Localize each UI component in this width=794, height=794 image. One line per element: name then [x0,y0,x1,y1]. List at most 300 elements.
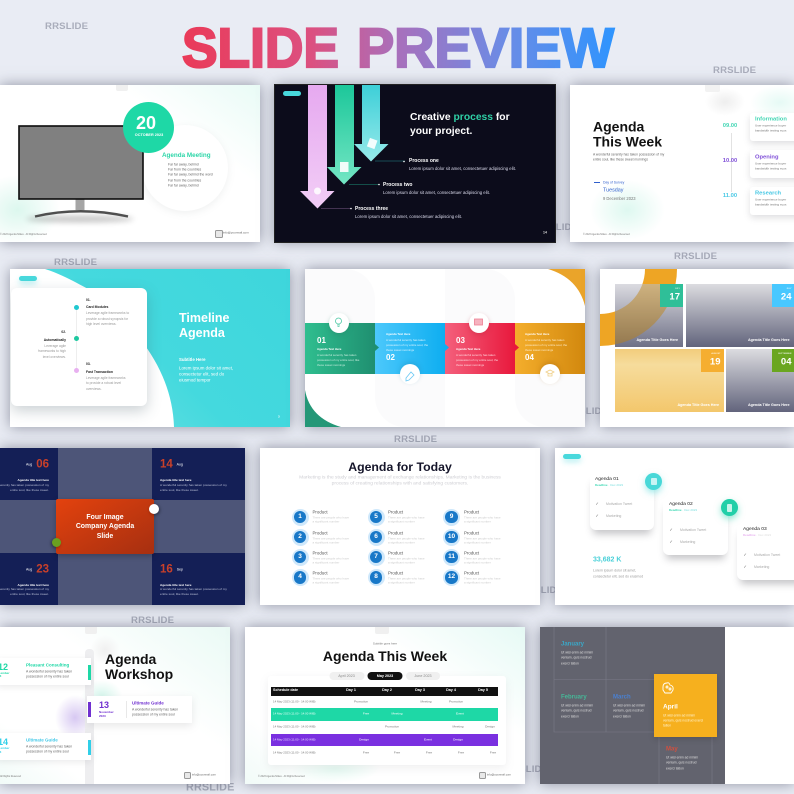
badge [19,276,37,281]
item 7 [388,549,425,564]
card 2 text: Agenda 02 [669,502,693,507]
date circle [123,102,174,153]
item 2 text: 02. [61,330,66,334]
segment arrows [375,344,519,351]
panel: agenda this week slide [570,85,794,242]
heading: your project. [410,126,472,137]
item 9: a significant number [464,519,491,523]
step 03 text: A wonderful serenity has taken [456,353,495,357]
april text: tation [663,724,671,728]
process two: Process two [383,182,412,188]
image 3 [615,349,724,412]
item 6: There are people who have [388,536,425,540]
row 5 value: Free [490,750,496,754]
item 7: There are people who have [388,556,425,560]
date 16 sep: 16 Sep [160,563,183,575]
card 3 text: possession of my entire soul [26,750,69,754]
center title: Company Agenda [76,523,134,530]
row 5 value: Free [394,750,400,754]
card 3 [0,733,91,760]
row 4 value: Design [453,737,463,741]
card 2 [663,498,728,555]
item 1 text: Leverage agile frameworks to [86,311,129,315]
text block top right: Agenda title text here [160,478,191,482]
item 12: Product [464,570,479,575]
row 2 value: Free [363,711,369,715]
card 1 text: A wonderful serenity has taken [26,670,72,674]
card 3 text [743,526,771,538]
agenda list: Far far away, behind [168,162,199,166]
item 4: a significant number [312,580,339,584]
item 2 text: frameworks to high [38,349,66,353]
badge number 10: 10 [448,532,455,540]
card 3 text: A wonderful serenity has taken [26,744,72,748]
card: research [750,187,794,215]
item 3 text: overviews. [86,387,102,391]
row 1 value: Meeting [420,699,432,703]
watermark: RRSLIDE [535,222,578,233]
segment 03 [445,323,515,374]
header day 1: Day 1 [346,688,356,692]
panel: monthly calendar slide [540,627,794,784]
badge number 11: 11 [448,552,455,560]
header day 2: Day 2 [382,688,392,692]
row 3 value: Meeting [452,724,464,728]
item 2: Product [312,530,328,535]
item 4: There are people who have [312,576,349,580]
item 11: Product [464,550,479,555]
card 1 checks: ✓ [596,513,599,518]
watermark: RRSLIDE [674,251,717,262]
card 1 text: Deadline · Dec 2023 [595,482,623,486]
text block top left: Agenda title text here [18,478,49,482]
row 5 value: Free [458,750,464,754]
header day 5: Day 5 [478,688,488,692]
badge number 2 [294,530,306,543]
card 1 date: ember [0,670,10,674]
date 04 [772,349,794,372]
watermark: RRSLIDE [394,434,437,445]
dark background [540,627,725,784]
segment 01 [305,323,375,374]
timeline card [11,288,147,406]
process one: Lorem ipsum dolor sit amet, consectetuer adipiscing elit. [409,166,516,171]
card 3 accent [88,740,91,754]
subtitle: Subtitle goes here [373,641,397,645]
step 04 text: possession of my entire soul, the [525,343,567,347]
text block top right: A wonderful serenity has taken possession of my [160,483,227,487]
card 1 text: Agenda 01 [595,476,619,482]
item 3: There are people who have [312,556,349,560]
card: opening [750,150,794,178]
heading: Workshop [105,666,173,682]
march: veniam, quis nostrud [613,709,643,713]
icon: april [661,682,675,694]
number 24: 24 [781,291,792,302]
day: Tuesday [603,187,623,193]
time 09.00: 09.00 [723,123,737,129]
heading: Creative process for [410,112,510,123]
april text: veniam, quis nostrud exerci [663,718,703,722]
text block bottom right: A wonderful serenity has taken possession of my [160,587,227,591]
agenda list: Far from the countries [168,178,201,182]
card 1 checks: ✓ [596,501,599,506]
navy block bottom right [152,553,245,605]
badge number 3: 3 [298,552,302,560]
agenda heading: Agenda Meeting [162,151,211,158]
panel: monitor agenda meeting slide [0,85,260,242]
item 4: Product [312,570,328,575]
item 3: a significant number [312,560,339,564]
badge 11 [443,548,460,566]
heading: This Week [593,134,662,150]
item 10: a significant number [464,540,491,544]
row 3 value: Design [485,724,495,728]
badge number 8 [370,571,382,584]
step 01 text: 01 [317,336,326,345]
panel: timeline agenda slide [10,269,290,427]
item 8: a significant number [388,580,415,584]
icon: agenda 02 circle [720,499,738,516]
email: info@yourmail.com [487,773,511,777]
step 04 text: A wonderful serenity has taken [525,338,564,342]
row 1 value: Promotion [449,699,463,703]
day of survey: Day of Survey [603,180,624,184]
white curved background [10,269,174,427]
orange ring [600,269,677,346]
item 7: Product [388,550,403,555]
process one [409,158,516,171]
january: January [561,641,584,647]
card 3 checks: ✓ [744,552,747,557]
item 1 text: Card Modules [86,305,108,309]
panel: four step band slide [305,269,585,427]
badge 7 [368,548,384,566]
green dot [52,538,60,547]
badge number 12: 12 [448,573,455,580]
description [593,153,664,162]
badge number 4: 4 [298,573,302,580]
body text [179,366,233,383]
badge number 6: 6 [374,532,378,540]
badge 6 [368,528,384,546]
item 1: a significant number [312,519,339,523]
opening text [755,154,786,170]
text block bottom right [160,582,227,596]
item 8: Product [388,570,403,575]
card 1 list: Marketing [606,514,621,518]
card 1 date [0,662,10,678]
card 2 date [99,700,114,718]
date aug 23: Aug 23 [26,563,49,575]
may: Ut wisi enim ad minim [666,755,698,759]
tab june: June 2023 [414,674,432,678]
heading: Agenda [593,118,644,134]
text block bottom left: Agenda title text here [18,582,49,586]
item 5: a significant number [388,519,415,523]
card 1 [590,473,654,530]
date aug 06: Aug 06 [26,458,49,470]
row 2 value: Meeting [391,711,403,715]
step 04 text [525,332,567,362]
time 11.00: 11.00 [723,193,737,199]
body text: consectetur elit, sed do [179,372,224,377]
card 3 checks [744,549,747,573]
card 2 text: Ultimate Guide [132,700,164,705]
card 1 list [606,498,632,522]
step 01 text: possession of my entire soul, like [317,358,359,362]
timeline line [730,133,732,192]
step 03 text [456,336,498,367]
timeline dot 3 [74,368,78,373]
copyright: © 2023 Agenda Slides · All Rights Reserved [0,233,47,236]
step 03 text: possession of my entire soul, the [456,358,498,362]
month august: AUGUST [711,353,720,355]
caption 4: Agenda Title Goes Here [748,403,790,407]
step 02 text: possession of my entire soul, the [386,343,428,347]
step 02 text: Agenda Text Here [386,332,410,336]
header day 4: Day 4 [446,688,456,692]
panel: four image company agenda slide [0,448,245,605]
row 2 value: Event [456,711,464,715]
table row green [271,708,498,720]
card 3 date [0,738,10,754]
item 11: a significant number [464,560,491,564]
caption 3: Agenda Title Goes Here [677,403,719,407]
image 2 [686,284,794,347]
tab june [406,672,440,680]
badge 1 [292,508,308,526]
february: veniam, quis nostrud [561,709,591,713]
text block top left: serenity has taken possession of my [0,483,49,487]
item 5: Product [388,509,403,514]
item 3: Product [312,550,328,555]
may [666,744,698,772]
item 8 [388,569,425,585]
corner accents [305,269,585,427]
watermark: RRSLIDE [131,615,174,626]
badge [563,454,581,459]
march: Ut wisi enim ad minim [613,703,645,707]
card 1 checks [596,498,599,522]
badge number 2: 2 [298,532,302,540]
heading [593,118,662,150]
table header [271,686,498,696]
navy block top left [0,448,58,500]
heading: Agenda This Week [323,648,447,664]
card 2 text: possession of my entire soul [132,712,175,716]
february [561,692,593,720]
tab may [368,672,402,680]
badge number 10 [445,530,458,543]
caption 1: Agenda Title Goes Here [636,338,678,342]
header day 3: Day 3 [415,688,425,692]
number 19: 19 [710,356,720,367]
card 3 date: ember [0,746,10,750]
card 3 list [754,549,780,573]
card 1 text: Pleasant Consulting [26,663,69,668]
february: Ut wisi enim ad minim [561,703,593,707]
center title [76,513,134,539]
item 5: There are people who have [388,515,425,519]
item 9: Product [464,509,479,514]
badge number 1 [294,510,306,523]
badge number 11 [445,550,458,563]
timeline line [75,307,78,371]
information text: User experience buyer [755,124,786,128]
april text [663,700,703,729]
badge number 4 [294,571,306,584]
item 11: There are people who have [464,556,501,560]
heading: Agenda [179,326,225,340]
badge number 12 [445,571,458,584]
description: A wonderful serenity has taken possession of my [593,153,664,157]
item 3 text: to provide a robust level [86,381,121,385]
card 1 text [595,476,623,488]
tab april: April 2023 [338,674,355,678]
row 1 date: 14 May 2023 (11:00 - 14:00 WIB) [273,699,316,703]
icon: pencil circle [400,364,420,384]
card 3 text: Deadline · Dec 2023 [743,533,771,537]
item 2 text: Automatically [44,337,66,341]
process three: Process three [355,206,388,212]
icon: screen circle [468,313,488,333]
number 17: 17 [669,291,680,302]
row 3 date: 14 May 2023 (11:00 - 14:00 WIB) [273,725,316,729]
row 5 value: Free [426,750,432,754]
item 9: There are people who have [464,515,501,519]
segment 02 [375,323,445,374]
step 02 text: A wonderful serenity has taken [386,338,425,342]
card 3 text: Agenda 03 [743,527,767,532]
card 2 list [680,524,706,548]
text block bottom left: entire soul, like these sweet. [10,592,49,596]
item 2 [312,530,349,544]
card: information [750,113,794,141]
description: entire soul, like these sweet mornings [593,158,648,162]
icon: email badge [215,230,223,238]
date 14 aug: 14 Aug [160,458,183,470]
item 1: Product [312,509,328,514]
step 04 text: these sweet mornings [525,348,553,352]
item 2: a significant number [312,540,339,544]
january: Ut wisi enim ad minim [561,650,593,654]
step 01 text: A wonderful serenity has taken [317,353,356,357]
panel: creative process slide [275,85,555,242]
information text: Information [755,117,787,123]
table card [268,676,506,765]
title: SLIDE [182,16,339,79]
ring overlay [615,284,667,344]
watermark: RRSLIDE [713,65,756,76]
process two [383,182,490,195]
card 2 checks [670,524,673,548]
badge 8 [368,569,384,586]
navy block bottom left [0,553,58,605]
step 02 text: these sweet mornings [386,348,414,352]
text block bottom right: entire soul, like these sweet. [160,592,199,596]
badge 10 [443,528,460,546]
item 1 text: provide a robust synopsis for [86,316,128,320]
vertical track [85,649,94,784]
item 9 [464,508,501,523]
row 3 value: Promotion [385,724,399,728]
information text [755,116,787,133]
item 10: Product [464,530,479,535]
item 6 [388,529,425,544]
email icon [184,772,191,779]
research text: bandwidth testing ecos [755,203,786,207]
item 4 [312,569,349,585]
watermark: RRSLIDE [565,406,608,417]
april text: April [663,703,678,710]
step 03 text: these sweet mornings [456,363,484,367]
heading [179,311,229,340]
heading [410,112,510,137]
process one: Process one [409,158,439,164]
body text: Lorem ipsum dolor sit amet, [179,366,233,371]
badge number 6 [370,530,382,543]
badge number 1: 1 [298,512,302,520]
opening text: User experience buyer [755,161,786,165]
page number: 3 [278,414,280,418]
item 10: There are people who have [464,536,501,540]
subtitle: Marketing is the study and management of exchange relationships. Marketing is the business [299,476,501,481]
item 1 text [86,297,130,326]
card 2 checks: ✓ [670,526,673,532]
icon glyph 02 [726,504,732,512]
row 1 value: Promotion [354,699,368,703]
step 02 text [386,332,428,362]
badge number 5 [370,510,382,523]
march [613,692,645,720]
timeline dot 1 [74,304,78,310]
badge 5 [368,508,384,526]
watermark: RRSLIDE [45,21,88,32]
card 2 date: 2023 [99,714,106,718]
step 03 text: Agenda Text Here [456,347,480,351]
item 2 text [38,330,66,359]
item 12 [464,569,501,585]
header labels: Schedule date [273,688,298,692]
row 4 date: 14 May 2023 (11:00 - 14:00 WIB) [273,738,316,742]
item 3 text: Fast Transaction [86,369,113,373]
item 6: a significant number [388,540,415,544]
month july: JULY [675,288,680,290]
date month: OCTOBER 2023 [135,133,163,137]
icon glyphs [335,318,555,382]
card 2 text [132,699,178,718]
page number: 14 [543,230,547,234]
item 11 [464,549,501,564]
step 02 text: 02 [386,353,395,362]
panel: agenda workshop slide [0,627,230,784]
watermark: RRSLIDE [186,782,234,794]
center title card [56,499,154,554]
chart: downward arrows [300,85,405,210]
title [182,16,616,79]
panel: agenda this week table slide [245,627,525,784]
may: veniam, quis nostrud [666,761,696,765]
research text: Research [755,191,781,197]
date 17 [660,284,683,307]
tab may: May 2023 [377,674,393,678]
email icon [479,772,486,779]
card 1 accent [88,664,91,680]
heading: Agenda [105,650,156,666]
statistic text [593,567,643,580]
opening text: bandwidth testing ecos [755,166,786,170]
